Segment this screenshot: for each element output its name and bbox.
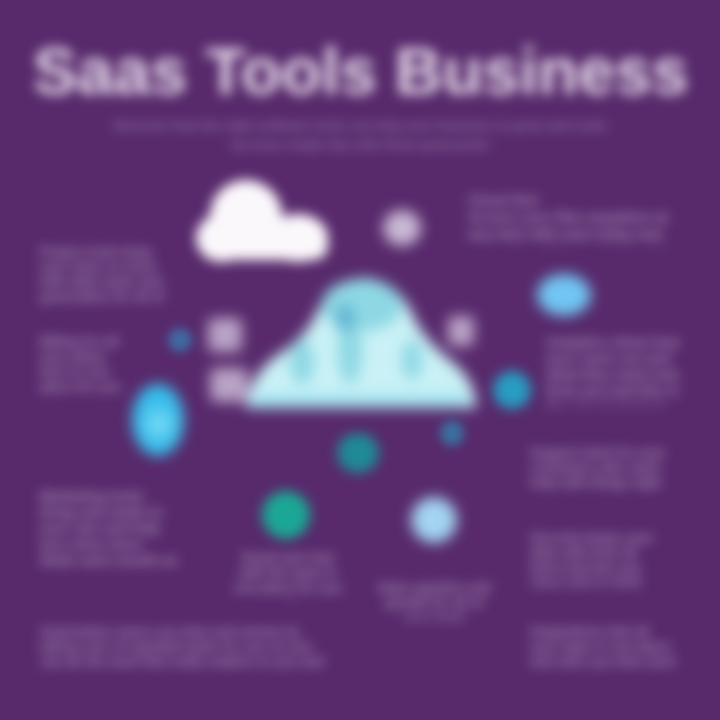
icon: blue oval <box>537 274 591 316</box>
icon: teal dot centre <box>337 433 379 473</box>
subtitle: Discover how the right software tools can help your business to grow and scale up every single day with these great picks <box>113 118 607 152</box>
cloud body <box>246 278 476 408</box>
title: Saas Tools Business <box>33 34 688 108</box>
text block: top right <box>466 190 680 248</box>
icon: small blue dot centre <box>440 420 464 446</box>
text block: left two: Billing for all your plans here in one place for you <box>40 334 121 394</box>
icon: light blue dot <box>411 497 457 543</box>
icon: small gear dot <box>383 210 421 246</box>
icon: blue drop <box>132 384 184 456</box>
icon: green dot <box>262 491 310 539</box>
text block: top right: Cloud Stor <box>468 192 540 208</box>
side blocks <box>208 316 474 402</box>
cloud shading <box>290 279 422 384</box>
icon: small blue dot left <box>168 328 192 352</box>
icon: teal blue dot right <box>493 371 531 409</box>
